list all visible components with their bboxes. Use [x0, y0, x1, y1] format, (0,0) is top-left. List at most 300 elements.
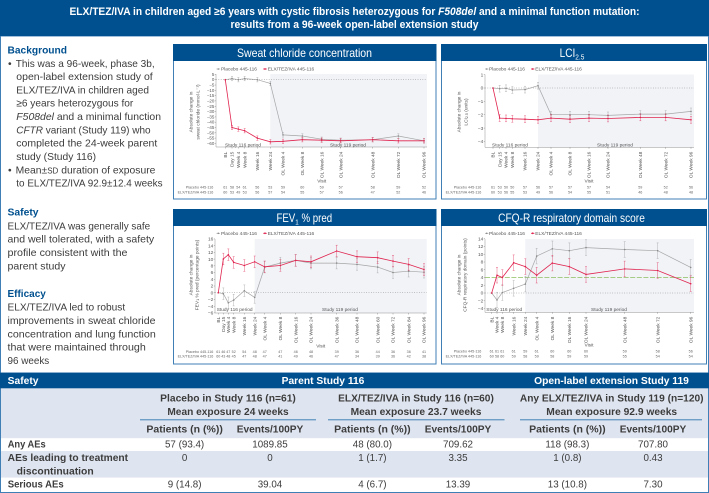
text block: background: to ELX/TEZ/IVA 92.9±12.4 weeks — [16, 179, 163, 190]
line chart: FEV1: 44 — [376, 350, 380, 354]
line chart: LCI2.5: 56 — [689, 185, 693, 189]
line chart: sweat chloride: 49 — [236, 191, 240, 195]
line chart: CFQ-R: 60 — [584, 349, 588, 353]
line chart: FEV1: ELX/TEZ/IVA 445-116 — [268, 231, 315, 237]
line chart: CFQ-R: BL — [489, 316, 495, 323]
line chart: sweat chloride: Week 8 — [242, 151, 248, 168]
line chart: CFQ-R: 60 — [500, 354, 504, 358]
line chart: sweat chloride: BL — [223, 151, 229, 158]
line chart: sweat chloride: −25 — [207, 104, 215, 109]
row: serious AEs: 4 (6.7) — [358, 480, 387, 490]
line chart: FEV1: OL Week 24 — [309, 316, 315, 343]
line chart: FEV1: OL Week 4 — [262, 316, 268, 340]
row: AEs leading to treatment discontinuation: 0 — [267, 453, 273, 464]
text block: efficacy — [8, 289, 156, 367]
line chart: FEV1: 45 — [232, 355, 236, 359]
line chart: sweat chloride: −50 — [207, 130, 215, 135]
line chart: LCI2.5: 2.5 — [465, 113, 469, 118]
line chart: LCI2.5: 1 — [481, 72, 484, 78]
line chart: FEV1 — [178, 231, 428, 359]
line chart: sweat chloride: 46 — [422, 191, 426, 195]
line chart: FEV1: 47 — [278, 350, 282, 354]
line chart: CFQ-R: 55 — [623, 354, 627, 358]
line chart: CFQ-R: 61 — [535, 349, 539, 353]
line chart: LCI2.5: BL — [491, 151, 497, 158]
line chart: sweat chloride: 58 — [230, 185, 234, 189]
line chart: FEV1: 49 — [294, 355, 298, 359]
line chart: CFQ-R: 2 — [481, 283, 484, 289]
line chart: LCI2.5: 50 — [510, 185, 514, 189]
panel: FEV1 % pred — [173, 209, 436, 364]
line chart: sweat chloride: 57 — [320, 191, 324, 195]
text block: efficacy: 96 weeks — [8, 356, 49, 367]
text block: efficacy: that were maintained through — [8, 343, 146, 354]
line chart: CFQ-R: 6 — [481, 267, 484, 273]
row: serious AEs: Serious AEs — [8, 480, 64, 490]
line chart: FEV1: −4 — [208, 304, 214, 310]
line chart: LCI2.5: Placebo 445-116 — [454, 185, 481, 189]
line chart: FEV1: 38 — [422, 355, 426, 359]
line chart: sweat chloride: OL Week 4 — [281, 151, 287, 175]
line chart: sweat chloride: 0 — [212, 77, 215, 82]
line chart: sweat chloride — [178, 67, 428, 195]
line chart: FEV1: 1 — [196, 299, 200, 301]
line chart: FEV1: 47 — [335, 355, 339, 359]
column headers: placebo in Study 116: Events/100PY — [237, 424, 303, 436]
line chart: LCI2.5: 53 — [498, 185, 502, 189]
line chart: FEV1: 60 — [216, 355, 220, 359]
heading: sweat chloride concentration: Sweat chloride concentration — [237, 47, 372, 60]
line chart: CFQ-R: 60 — [567, 349, 571, 353]
line chart: FEV1: Day 15 — [221, 316, 227, 332]
panel: LCI2.5 — [441, 44, 707, 199]
line chart: CFQ-R: −4 — [478, 306, 484, 312]
line chart: FEV1: Placebo 445-116 — [221, 231, 257, 237]
line chart: CFQ-R: 56 — [689, 349, 693, 353]
text block: safety: ELX/TEZ/IVA was generally safe — [8, 221, 150, 232]
row: any AEs: 57 (93.4) — [165, 440, 204, 450]
line chart: sweat chloride: −35 — [207, 114, 215, 119]
line chart: sweat chloride: −55 — [207, 136, 215, 141]
line chart: FEV1: BL — [216, 316, 222, 323]
row: serious AEs: 13 (10.8) — [548, 480, 587, 490]
line chart: sweat chloride: 56 — [255, 191, 259, 195]
line chart: FEV1: 48 — [253, 355, 257, 359]
row: any AEs: Any AEs — [8, 440, 46, 450]
line chart: LCI2.5: 52 — [664, 185, 668, 189]
line chart: CFQ-R: 8 — [481, 260, 484, 266]
line chart: FEV1: 36 — [355, 350, 359, 354]
line chart: sweat chloride: Placebo 445-116 — [186, 185, 213, 189]
line chart: LCI2.5: OL Week 8 — [568, 151, 574, 175]
panel: sweat chloride concentration — [173, 44, 436, 199]
line chart: FEV1: 61 — [216, 350, 220, 354]
title banner: ELX/TEZ/IVA in children aged ≥6 years with cystic fibrosis heterozygous for F508del and a minimal function mutation: — [70, 6, 640, 18]
column headers: ELX/TEZ/IVA in Study 116: Mean exposure 23.7 weeks — [351, 407, 482, 418]
column headers: ELX/TEZ/IVA in Study 116: ELX/TEZ/IVA in Study 116 (n=60) — [338, 394, 494, 405]
line chart: sweat chloride: Week 24 — [268, 151, 274, 171]
line chart: CFQ-R: ELX/TEZ/IVA 445-116 — [535, 231, 582, 237]
line chart: CFQ-R: 61 — [500, 349, 504, 353]
line chart: CFQ-R: OL Week 24 — [584, 316, 590, 343]
panel: CFQ-R respiratory domain score — [441, 209, 707, 364]
line chart: LCI2.5: (units) — [463, 98, 469, 113]
line chart: FEV1: 47 — [263, 350, 267, 354]
line chart: FEV1: OL Week 8 — [278, 316, 284, 340]
line chart: FEV1: 39 — [335, 350, 339, 354]
line chart: CFQ-R: Placebo 445-116 — [454, 349, 481, 353]
row: serious AEs: 7.30 — [643, 480, 663, 490]
line chart: CFQ-R: Week 24 — [523, 316, 529, 336]
line chart: LCI2.5: 53 — [498, 190, 502, 194]
line chart: sweat chloride: −10 — [207, 88, 215, 93]
line chart: FEV1: 16 — [208, 237, 214, 243]
line chart: sweat chloride: 56 — [339, 191, 343, 195]
line chart: LCI2.5: Study 116 period — [492, 142, 528, 148]
line chart: FEV1: 8 — [211, 264, 214, 270]
line chart: FEV1: Placebo 445-116 — [186, 350, 213, 354]
line chart: FEV1: 12 — [208, 250, 214, 256]
line chart: FEV1: 42 — [407, 355, 411, 359]
line chart: FEV1: 41 — [422, 350, 426, 354]
text block: background: completed the 24-week parent — [16, 139, 157, 150]
line chart: LCI2.5: 55 — [587, 190, 591, 194]
line chart: LCI2.5: 56 — [536, 185, 540, 189]
line chart: CFQ-R: 54 — [689, 354, 693, 358]
row: AEs leading to treatment discontinuation: 1 (1.7) — [358, 453, 387, 464]
line chart: FEV1: % pred (percentage points) — [194, 239, 200, 299]
text block: efficacy: concentration and lung function — [8, 329, 156, 340]
line chart: sweat chloride: −15 — [207, 93, 215, 98]
line chart: CFQ-R: Week 16 — [511, 316, 517, 336]
line chart: CFQ-R: CFQ-R respiratory domain (points) — [463, 238, 469, 312]
line chart: sweat chloride: −20 — [207, 98, 215, 103]
line chart: FEV1: 36 — [407, 350, 411, 354]
line chart: FEV1: 46 — [221, 350, 225, 354]
line chart: FEV1: 54 — [242, 350, 246, 354]
text block: background: • — [8, 165, 12, 176]
line chart: FEV1: 36 — [391, 350, 395, 354]
line chart: LCI2.5: Visit — [585, 179, 594, 185]
line chart: FEV1: Study 116 period — [217, 307, 253, 313]
table header bar: Safety — [8, 376, 39, 387]
line chart: sweat chloride: 54 — [236, 185, 240, 189]
line chart: FEV1: 52 — [232, 350, 236, 354]
line chart: FEV1: 6 — [211, 270, 214, 276]
text block: safety: profile consistent with the — [8, 248, 128, 259]
line chart: LCI2.5: ELX/TEZ/IVA 445-116 — [446, 190, 481, 194]
line chart: LCI2.5: Week 8 — [510, 151, 516, 168]
line chart: CFQ-R: 58 — [495, 354, 499, 358]
text block: background: ≥6 years heterozygous for — [16, 99, 134, 110]
line chart: FEV1: 48 — [253, 350, 257, 354]
line chart: sweat chloride: Day 15 — [230, 151, 236, 167]
line chart: FEV1: 43 — [221, 355, 225, 359]
line chart: LCI2.5: 48 — [689, 190, 693, 194]
line chart: LCI2.5: 0 — [481, 86, 484, 92]
line chart: LCI2.5: Placebo 445-116 — [489, 67, 525, 73]
line chart: FEV1: OL Week 72 — [391, 316, 397, 343]
line chart: CFQ-R: 59 — [523, 349, 527, 353]
line chart: LCI2.5: 53 — [523, 190, 527, 194]
text block: background — [8, 45, 163, 190]
line chart: CFQ-R: 0 — [481, 291, 484, 297]
column headers: placebo in Study 116 — [140, 394, 316, 436]
column headers: any ELX/TEZ/IVA in Study 119: Patients (n (%)) — [529, 424, 606, 436]
line chart: LCI2.5: OL Week 48 — [638, 151, 644, 178]
line chart: sweat chloride: 57 — [268, 191, 272, 195]
line chart: CFQ-R: 4 — [481, 275, 484, 281]
line chart: FEV1: 36 — [391, 355, 395, 359]
line chart: FEV1: 48 — [226, 355, 230, 359]
line chart: FEV1: OL Week 36 — [334, 316, 340, 343]
line chart: sweat chloride: 54 — [281, 191, 285, 195]
safety table — [0, 373, 709, 492]
line chart: sweat chloride: 57 — [339, 185, 343, 189]
row: any AEs: 1089.85 — [252, 440, 288, 450]
line chart: sweat chloride: −45 — [207, 125, 215, 130]
line chart: LCI2.5: Day 15 — [497, 151, 503, 167]
line chart: FEV1: Absolute change in — [188, 254, 194, 295]
line chart: FEV1: Week 24 — [252, 316, 258, 336]
line chart: sweat chloride: −5 — [209, 82, 215, 88]
line chart: sweat chloride: sweat chloride (mmol·L⁻¹) — [196, 84, 202, 140]
line chart: CFQ-R: Placebo 445-116 — [489, 231, 525, 237]
line chart: CFQ-R: 58 — [656, 349, 660, 353]
line chart: LCI2.5: 56 — [504, 190, 508, 194]
line chart: sweat chloride: 56 — [255, 185, 259, 189]
text block: background: open-label extension study of — [16, 72, 153, 83]
line chart: CFQ-R: Study 116 period — [486, 307, 523, 313]
row: any AEs — [8, 440, 669, 450]
line chart: FEV1: −6 — [208, 311, 214, 317]
line chart: CFQ-R: 59 — [623, 349, 627, 353]
line chart: LCI2.5: 48 — [664, 190, 668, 194]
line chart: LCI2.5: OL Week 24 — [606, 151, 612, 178]
line chart: sweat chloride: 61 — [243, 185, 247, 189]
line chart: sweat chloride: 60 — [300, 185, 304, 189]
row: AEs leading to treatment discontinuation: 3.35 — [448, 453, 468, 464]
line chart: LCI2.5: OL Week 16 — [587, 151, 593, 178]
line chart: LCI2.5: ELX/TEZ/IVA 445-116 — [535, 67, 582, 73]
line chart: CFQ-R: ELX/TEZ/IVA 445-116 — [446, 354, 481, 358]
line chart: LCI2.5: OL Week 72 — [663, 151, 669, 178]
row: AEs leading to treatment discontinuation: 0 — [182, 453, 188, 464]
line chart: CFQ-R: Study 119 period — [591, 307, 627, 313]
line chart: FEV1: 48 — [309, 350, 313, 354]
row: AEs leading to treatment discontinuation: 1 (0.8) — [553, 453, 582, 464]
line chart: LCI2.5: 57 — [523, 185, 527, 189]
heading: CFQ-R respiratory domain score: CFQ-R respiratory domain score — [498, 212, 645, 225]
line chart: CFQ-R: 10 — [478, 252, 484, 258]
line chart: sweat chloride: Week 16 — [255, 151, 261, 171]
line chart: LCI2.5: 57 — [568, 185, 572, 189]
line chart: LCI2.5: Week 4 — [504, 151, 510, 168]
line chart: sweat chloride: 53 — [268, 185, 272, 189]
line chart: LCI2.5: OL Week 4 — [549, 151, 555, 175]
line chart: LCI2.5: 57 — [587, 185, 591, 189]
line chart: LCI2.5: 54 — [568, 190, 572, 194]
line chart: CFQ-R: 58 — [550, 354, 554, 358]
line chart: LCI2.5: Week 24 — [536, 151, 542, 171]
line chart: CFQ-R: 58 — [523, 354, 527, 358]
line chart: CFQ-R: −2 — [478, 298, 484, 304]
text block: safety: and well tolerated, with a safety — [8, 235, 155, 246]
line chart: FEV1: 0 — [211, 290, 214, 296]
line chart: FEV1: 2 — [211, 284, 214, 290]
line chart: sweat chloride: 58 — [371, 185, 375, 189]
row: serious AEs: 39.04 — [258, 480, 283, 490]
text block: background: This was a 96-week, phase 3b, — [16, 59, 155, 70]
line chart: LCI2.5: 59 — [638, 185, 642, 189]
row: serious AEs: 9 (14.8) — [168, 480, 201, 490]
row: serious AEs — [8, 480, 663, 490]
line chart: CFQ-R: OL Week 48 — [622, 316, 628, 343]
line chart: CFQ-R: Week 8 — [500, 316, 506, 333]
title banner: results from a 96-week open-label extension study — [230, 19, 479, 31]
line chart: CFQ-R: 61 — [490, 349, 494, 353]
line chart: sweat chloride: ELX/TEZ/IVA 445-116 — [268, 67, 315, 73]
line chart: FEV1: OL Week 48 — [355, 316, 361, 343]
line chart: CFQ-R: 60 — [490, 354, 494, 358]
text block: background: Background — [8, 45, 67, 56]
line chart: sweat chloride: 60 — [223, 191, 227, 195]
line chart: sweat chloride: Week 4 — [236, 151, 242, 168]
heading: FEV1 % pred: 1 — [295, 217, 299, 226]
table header bar: Open-label extension Study 119 — [534, 376, 689, 387]
column headers: ELX/TEZ/IVA in Study 116: Events/100PY — [425, 424, 491, 436]
line chart: LCI2.5: 54 — [606, 185, 610, 189]
line chart: CFQ-R: 59 — [567, 354, 571, 358]
line chart: CFQ-R: 54 — [656, 354, 660, 358]
heading: FEV1 % pred: FEV — [276, 212, 299, 225]
line chart: FEV1: FEV — [195, 301, 200, 310]
text block: safety — [8, 208, 155, 272]
column headers: any ELX/TEZ/IVA in Study 119: Mean exposure 92.9 weeks — [546, 407, 677, 418]
line chart: LCI2.5: Week 16 — [523, 151, 529, 171]
line chart: FEV1: 34 — [355, 355, 359, 359]
line chart: FEV1: 39 — [376, 355, 380, 359]
row: AEs leading to treatment discontinuation: AEs leading to treatment — [8, 453, 129, 464]
line chart: FEV1: Study 119 period — [322, 307, 358, 313]
line chart: CFQ-R: 14 — [478, 236, 484, 242]
line chart: LCI2.5: Study 119 period — [597, 142, 633, 148]
line chart: LCI2.5: OL Week 96 — [689, 151, 695, 178]
line chart: CFQ-R: OL Week 8 — [550, 316, 556, 340]
line chart: LCI2.5: 49 — [536, 190, 540, 194]
line chart: sweat chloride: 52 — [422, 185, 426, 189]
line chart: CFQ-R: Visit — [585, 343, 594, 349]
line chart: LCI2.5: 46 — [638, 190, 642, 194]
line chart: sweat chloride: 59 — [281, 185, 285, 189]
row: AEs leading to treatment discontinuation — [8, 453, 663, 478]
line chart: FEV1: 46 — [294, 350, 298, 354]
line chart: LCI2.5: 57 — [549, 185, 553, 189]
line chart: sweat chloride: 59 — [396, 185, 400, 189]
heading: FEV1 % pred: % pred — [299, 212, 332, 225]
line chart: CFQ-R: OL Week 72 — [655, 316, 661, 343]
line chart: LCI2.5 — [446, 67, 695, 194]
column headers: ELX/TEZ/IVA in Study 116: Patients (n (%)) — [334, 424, 411, 436]
line chart: sweat chloride: OL Week 24 — [338, 151, 344, 178]
line chart: sweat chloride: 5 — [212, 72, 215, 77]
line chart: sweat chloride: 53 — [243, 191, 247, 195]
line chart: LCI2.5: −2 — [478, 112, 484, 118]
line chart: sweat chloride: −30 — [207, 109, 215, 114]
line chart: sweat chloride: OL Week 48 — [370, 151, 376, 178]
line chart: sweat chloride: 52 — [396, 191, 400, 195]
line chart: CFQ-R: 59 — [584, 354, 588, 358]
line chart: LCI2.5: 50 — [504, 185, 508, 189]
line chart: sweat chloride: OL Week 8 — [300, 151, 306, 175]
column headers: placebo in Study 116: Mean exposure 24 weeks — [167, 407, 289, 418]
row: any AEs: 707.80 — [638, 440, 669, 450]
line chart: LCI2.5: 61 — [491, 185, 495, 189]
line chart: CFQ-R: 59 — [535, 354, 539, 358]
line chart: FEV1: 47 — [242, 355, 246, 359]
text block: efficacy: Efficacy — [8, 289, 46, 300]
row: AEs leading to treatment discontinuation: 0.43 — [643, 453, 663, 464]
line chart: sweat chloride: ELX/TEZ/IVA 445-116 — [178, 191, 213, 195]
title banner — [0, 0, 709, 36]
text block: background: CFTR variant (Study 119) who — [16, 125, 151, 136]
line chart: FEV1: 47 — [263, 355, 267, 359]
row: any AEs: 709.62 — [443, 440, 473, 450]
line chart: CFQ-R: Week 4 — [495, 316, 501, 333]
text block: background: ELX/TEZ/IVA in children aged — [16, 85, 149, 96]
line chart: sweat chloride: Study 119 period — [330, 142, 366, 148]
line chart: LCI2.5: −4 — [478, 139, 484, 145]
heading: LCI2.5: LCI — [560, 47, 578, 60]
line chart: CFQ-R: 12 — [478, 244, 484, 250]
text block: efficacy: ELX/TEZ/IVA led to robust — [8, 303, 125, 314]
line chart: FEV1: OL Week 96 — [422, 316, 428, 343]
line chart: CFQ-R: OL Week 16 — [567, 316, 573, 343]
text block: safety: Safety — [8, 208, 39, 219]
line chart: sweat chloride: OL Week 72 — [396, 151, 402, 178]
line chart: CFQ-R: 61 — [495, 349, 499, 353]
line chart: FEV1: 46 — [309, 355, 313, 359]
line chart: sweat chloride: −40 — [207, 120, 215, 125]
line chart: sweat chloride: Visit — [317, 179, 327, 185]
column headers: placebo in Study 116: Patients (n (%)) — [146, 424, 223, 436]
line chart: FEV1: 41 — [278, 355, 282, 359]
line chart: LCI2.5: −1 — [478, 99, 484, 105]
line chart: sweat chloride: OL Week 16 — [319, 151, 325, 178]
line chart: CFQ-R — [446, 231, 694, 358]
line chart: FEV1: OL Week 84 — [406, 316, 412, 343]
line chart: LCI2.5: −3 — [478, 126, 484, 132]
line chart: sweat chloride: 55 — [300, 191, 304, 195]
line chart: FEV1: OL Week 60 — [375, 316, 381, 343]
text block: efficacy: improvements in sweat chloride — [8, 316, 156, 327]
line chart: LCI2.5: 55 — [510, 190, 514, 194]
line chart: FEV1: 4 — [211, 277, 214, 283]
line chart: LCI2.5: LCI — [464, 118, 469, 126]
text block: background: study (Study 116) — [16, 152, 96, 163]
row: serious AEs: 13.39 — [446, 480, 470, 490]
line chart: FEV1: Week 4 — [226, 316, 232, 333]
line chart: sweat chloride: Study 116 period — [225, 142, 261, 148]
line chart: sweat chloride: Placebo 445-116 — [221, 67, 257, 73]
column headers: any ELX/TEZ/IVA in Study 119 — [520, 394, 704, 436]
line chart: sweat chloride: 61 — [223, 185, 227, 189]
line chart: sweat chloride: OL Week 96 — [422, 151, 428, 178]
line chart: FEV1: 47 — [226, 350, 230, 354]
line chart: sweat chloride: −60 — [207, 141, 215, 146]
row: any AEs: 118 (98.3) — [545, 440, 589, 450]
text block: safety: parent study — [8, 261, 66, 272]
